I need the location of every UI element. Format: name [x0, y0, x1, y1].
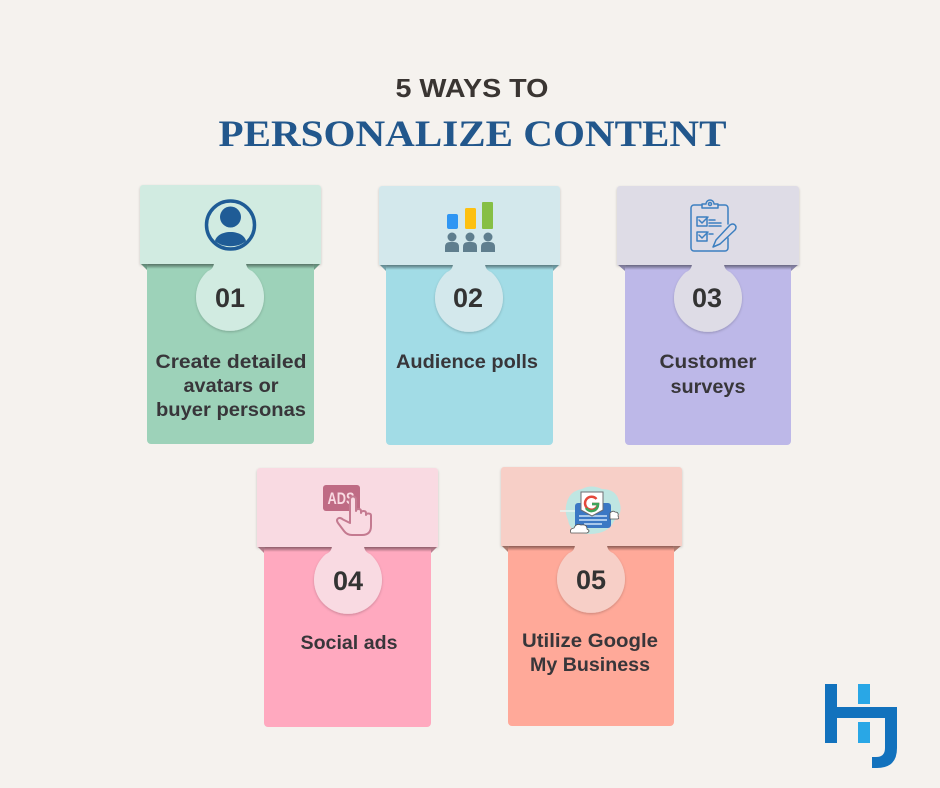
icon: audience bar chart	[445, 202, 495, 252]
label: create detailed avatars: avatars or	[184, 375, 279, 397]
icon: google keyboard	[560, 486, 621, 534]
icon: clipboard survey	[691, 200, 736, 251]
label: audience polls: Audience polls	[396, 351, 538, 373]
label: create detailed avatars: buyer personas	[156, 399, 306, 421]
label: social ads: Social ads	[300, 632, 398, 654]
panel: card 05	[501, 467, 682, 726]
panel: card 01	[140, 185, 321, 444]
label: create detailed avatars: Create detailed	[156, 351, 306, 373]
label: utilize google my business: Utilize Google	[522, 630, 658, 652]
number 01: 01	[215, 283, 245, 313]
title: personalize content: PERSONALIZE CONTENT	[218, 114, 727, 155]
icon: ads click: ADS	[328, 489, 354, 508]
panel: card 03	[617, 186, 799, 445]
number 05: 05	[576, 565, 606, 595]
panel: card 04	[257, 468, 438, 727]
label: customer surveys: Customer	[660, 351, 757, 373]
label: customer surveys: surveys	[670, 376, 746, 398]
heading: 5 ways to: 5 WAYS TO	[396, 73, 548, 103]
panel: card 02	[379, 186, 560, 445]
number 02: 02	[453, 283, 483, 313]
number 03: 03	[692, 283, 722, 313]
icon: ads click	[323, 485, 371, 535]
number 04: 04	[333, 566, 363, 596]
icon: avatar	[206, 201, 254, 249]
label: utilize google my business: My Business	[530, 654, 650, 676]
logo: HJ	[825, 684, 897, 768]
